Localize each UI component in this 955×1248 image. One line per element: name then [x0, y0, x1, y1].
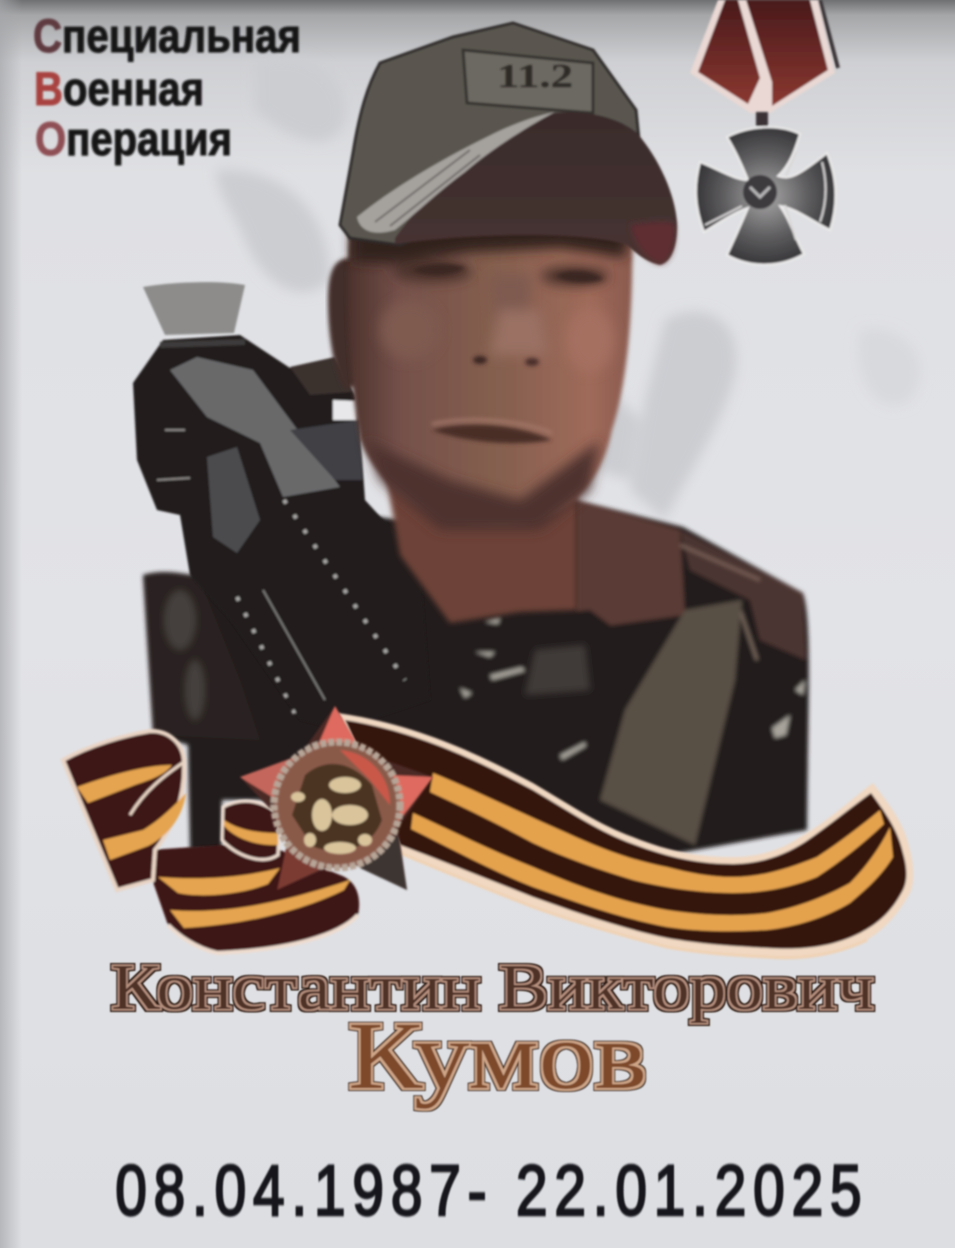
inner curl	[222, 801, 280, 859]
heading: СВО abbreviation: Специальная	[33, 9, 301, 62]
facial features	[352, 215, 632, 530]
cap patch text: 11.2	[497, 58, 573, 95]
ribbon long right	[338, 713, 913, 958]
ear	[328, 258, 358, 390]
rifle stock	[143, 282, 245, 335]
cap	[340, 23, 677, 265]
St George ribbon	[63, 706, 913, 958]
top flap	[63, 731, 184, 890]
given name and patronymic: Константин Викторович	[111, 951, 874, 1024]
name	[111, 951, 874, 1109]
medal ribbon	[690, 0, 838, 113]
heading: СВО abbreviation: Военная	[34, 62, 204, 115]
neck	[385, 420, 577, 623]
shoulder strap	[600, 600, 742, 845]
cap stripe highlight	[357, 112, 555, 233]
victory order star badge	[240, 706, 433, 890]
cap visor	[395, 112, 677, 265]
rifle body	[133, 335, 430, 730]
heading: СВО abbreviation: Операция	[35, 112, 232, 165]
rifle rail dots	[284, 500, 405, 680]
cap crown	[340, 23, 640, 245]
face	[348, 210, 632, 525]
lower fold	[150, 845, 359, 953]
medal cross	[696, 112, 836, 265]
chest	[420, 610, 630, 800]
jacket	[143, 500, 809, 860]
camouflage background blobs	[215, 56, 920, 520]
surname: Кумов	[348, 1002, 647, 1109]
rifle	[133, 282, 430, 730]
collar right	[577, 500, 685, 630]
heading: СВО abbreviation	[33, 9, 301, 165]
ribbon left fold	[63, 731, 359, 953]
soldier portrait	[133, 23, 809, 860]
cap patch	[463, 50, 593, 113]
rifle receiver	[170, 357, 340, 497]
shoulder	[680, 530, 806, 660]
dates: 08.04.1987- 22.01.2025	[115, 1151, 862, 1230]
medal	[690, 0, 838, 265]
